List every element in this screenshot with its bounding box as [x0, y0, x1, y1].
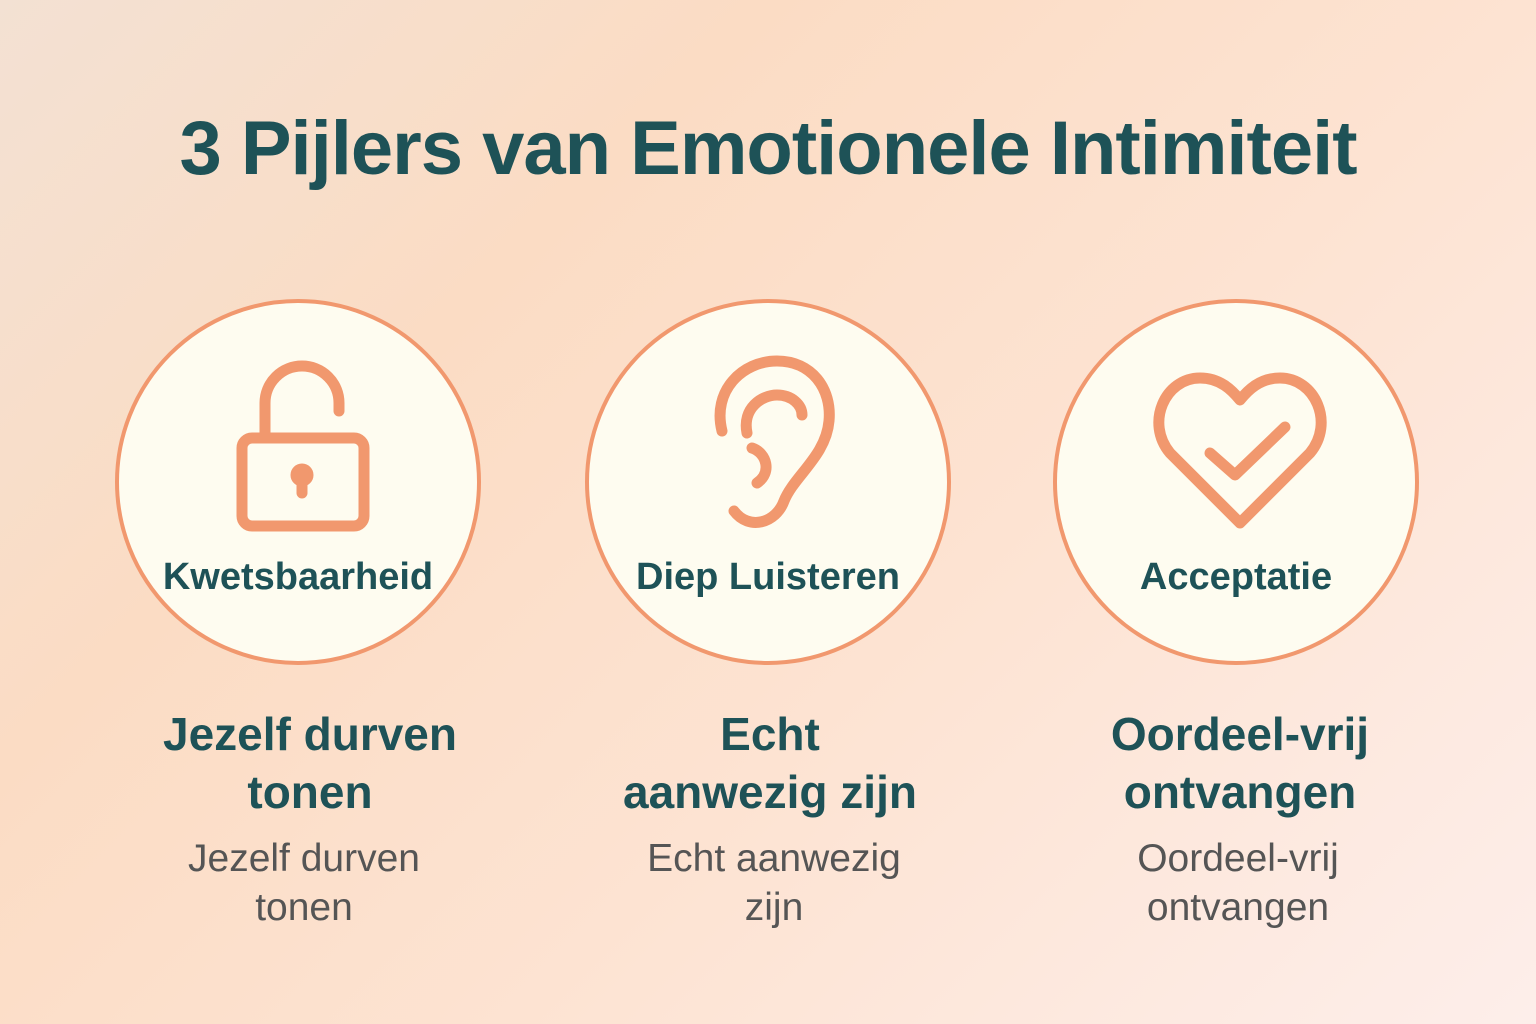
icon: open lock [236, 360, 370, 532]
sub 2: Echt aanwezig [647, 837, 901, 880]
label: Kwetsbaarheid [163, 556, 433, 598]
sub 1 [188, 837, 420, 929]
icon: ear [714, 356, 835, 528]
heading 3: ontvangen [1124, 766, 1356, 818]
heading 1 [163, 708, 457, 818]
sub 3 [1137, 837, 1339, 929]
label: Acceptatie [1140, 556, 1332, 598]
sub 1: tonen [255, 886, 353, 929]
heading 2 [623, 708, 917, 818]
heading 1: Jezelf durven [163, 708, 457, 760]
heading 1: tonen [247, 766, 373, 818]
panel: diep luisteren [585, 299, 951, 665]
heading 2: Echt [720, 708, 820, 760]
sub 2: zijn [745, 886, 803, 929]
panel: kwetsbaarheid [115, 299, 481, 665]
heading 2: aanwezig zijn [623, 766, 917, 818]
sub 3: ontvangen [1147, 886, 1329, 929]
sub 3: Oordeel-vrij [1137, 837, 1339, 880]
sub 2 [647, 837, 901, 929]
title: 3 Pijlers van Emotionele Intimiteit [179, 106, 1357, 191]
heading 3 [1111, 708, 1369, 818]
icon: heart check [1153, 372, 1327, 528]
label: Diep Luisteren [636, 556, 900, 598]
heading 3: Oordeel-vrij [1111, 708, 1369, 760]
sub 1: Jezelf durven [188, 837, 420, 880]
panel: acceptatie [1053, 299, 1419, 665]
